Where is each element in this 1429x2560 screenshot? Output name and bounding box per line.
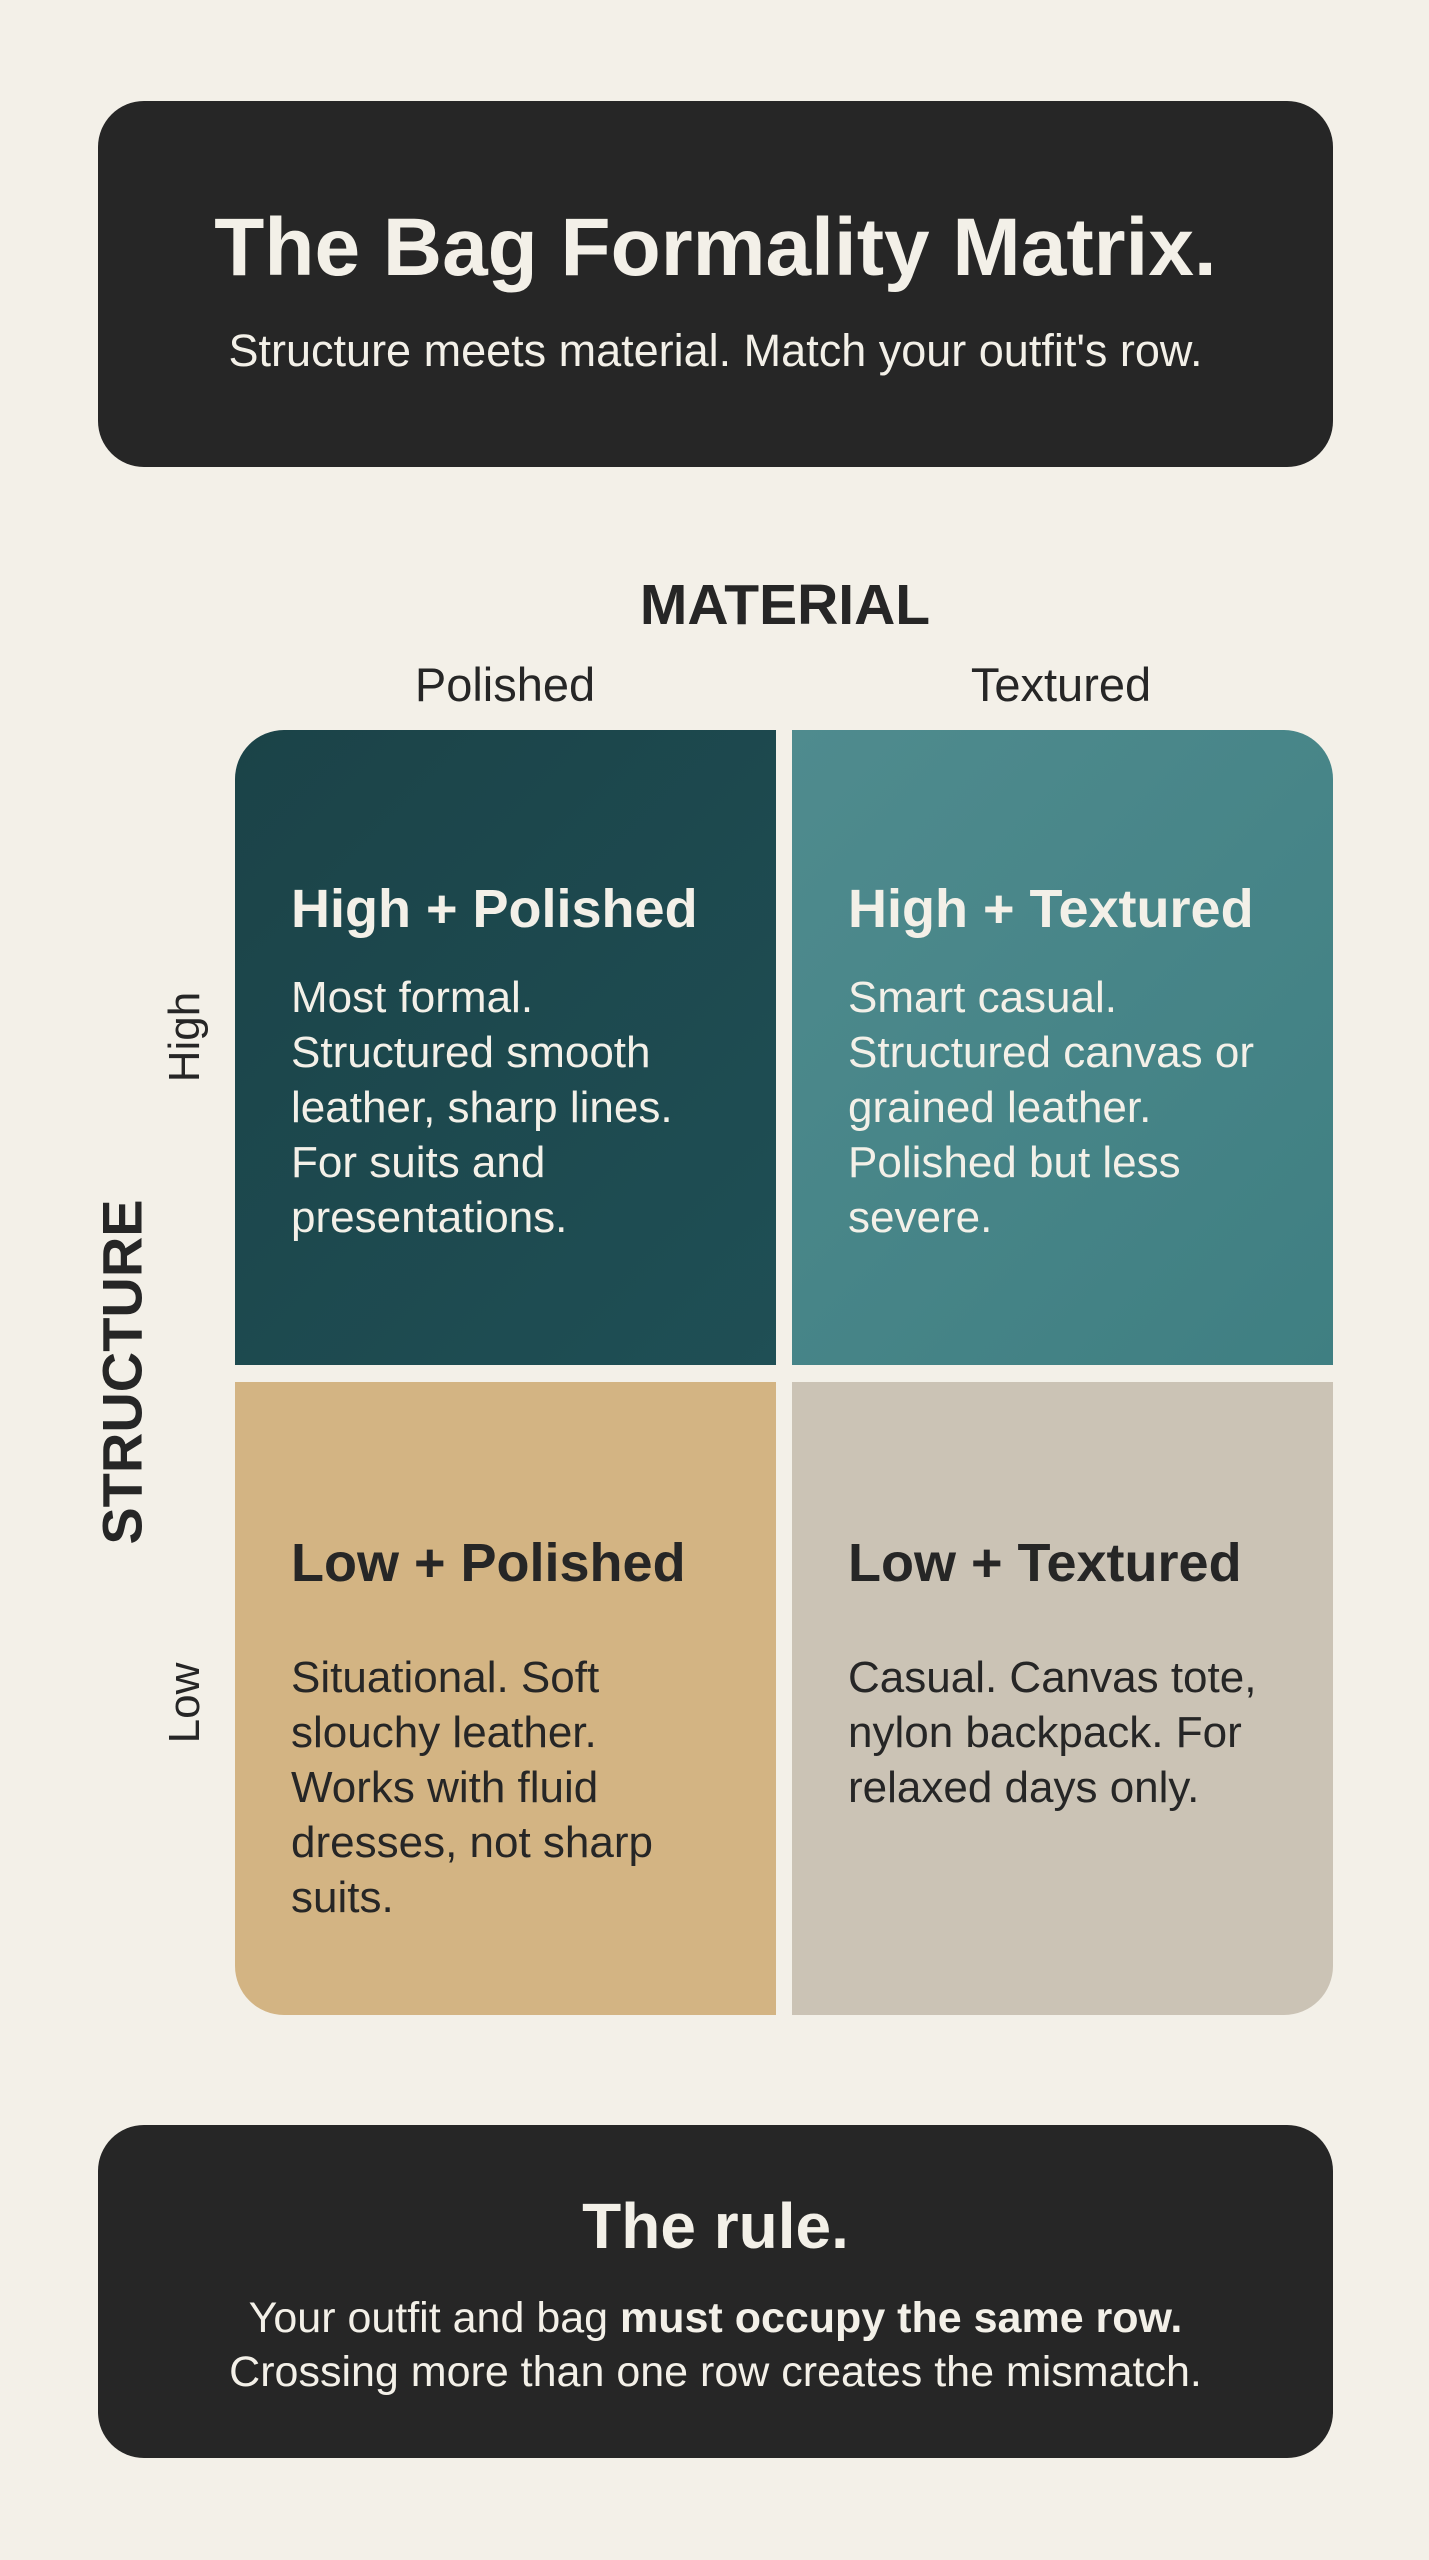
- cell: low textured: Low + Textured: [848, 1533, 1242, 1593]
- cell: high polished: Most formal.: [291, 973, 533, 1022]
- cell: high polished: Structured smooth: [291, 1028, 650, 1077]
- axis label: structure: STRUCTURE: [90, 1199, 154, 1545]
- cell: low textured: [792, 1382, 1333, 2015]
- title: The Bag Formality Matrix.: [214, 202, 1217, 293]
- row label: low: Low: [160, 1663, 209, 1743]
- cell: high textured: High + Textured: [848, 879, 1254, 939]
- cell: high textured: Smart casual.: [848, 973, 1117, 1022]
- cell: low polished: Low + Polished: [291, 1533, 686, 1593]
- cell: low polished: dresses, not sharp: [291, 1818, 653, 1867]
- cell: high polished: [235, 730, 776, 1365]
- row label: high: High: [160, 992, 209, 1082]
- rule heading: The rule.: [582, 2190, 849, 2262]
- title box: [98, 101, 1333, 467]
- cell: high polished: presentations.: [291, 1193, 567, 1242]
- cell: high polished: High + Polished: [291, 879, 698, 939]
- cell: low polished: Works with fluid: [291, 1763, 598, 1812]
- cell: high textured: severe.: [848, 1193, 992, 1242]
- column label: polished: Polished: [415, 658, 595, 711]
- cell: high textured: Polished but less: [848, 1138, 1181, 1187]
- cell: high textured: Structured canvas or: [848, 1028, 1254, 1077]
- rule box: [98, 2125, 1333, 2458]
- cell: low polished: [235, 1382, 776, 2015]
- cell: low polished: suits.: [291, 1873, 394, 1922]
- cell: low textured: relaxed days only.: [848, 1763, 1199, 1812]
- cell: high polished: leather, sharp lines.: [291, 1083, 673, 1132]
- cell: high textured: grained leather.: [848, 1083, 1151, 1132]
- cell: low polished: Situational. Soft: [291, 1653, 599, 1702]
- rule text: Your outfit and bag must occupy the same row.: [249, 2294, 1182, 2342]
- cell: high textured: [792, 730, 1333, 1365]
- cell: low textured: Casual. Canvas tote,: [848, 1653, 1256, 1702]
- cell: low textured: nylon backpack. For: [848, 1708, 1242, 1757]
- axis label: material: MATERIAL: [640, 573, 930, 637]
- column label: textured: Textured: [971, 658, 1151, 711]
- subtitle: Structure meets material. Match your outfit's row.: [229, 325, 1202, 376]
- cell: low polished: slouchy leather.: [291, 1708, 597, 1757]
- rule text: [229, 2294, 1202, 2396]
- rule text: Crossing more than one row creates the mismatch.: [229, 2348, 1202, 2396]
- matrix grid: [235, 730, 1333, 2015]
- cell: high polished: For suits and: [291, 1138, 545, 1187]
